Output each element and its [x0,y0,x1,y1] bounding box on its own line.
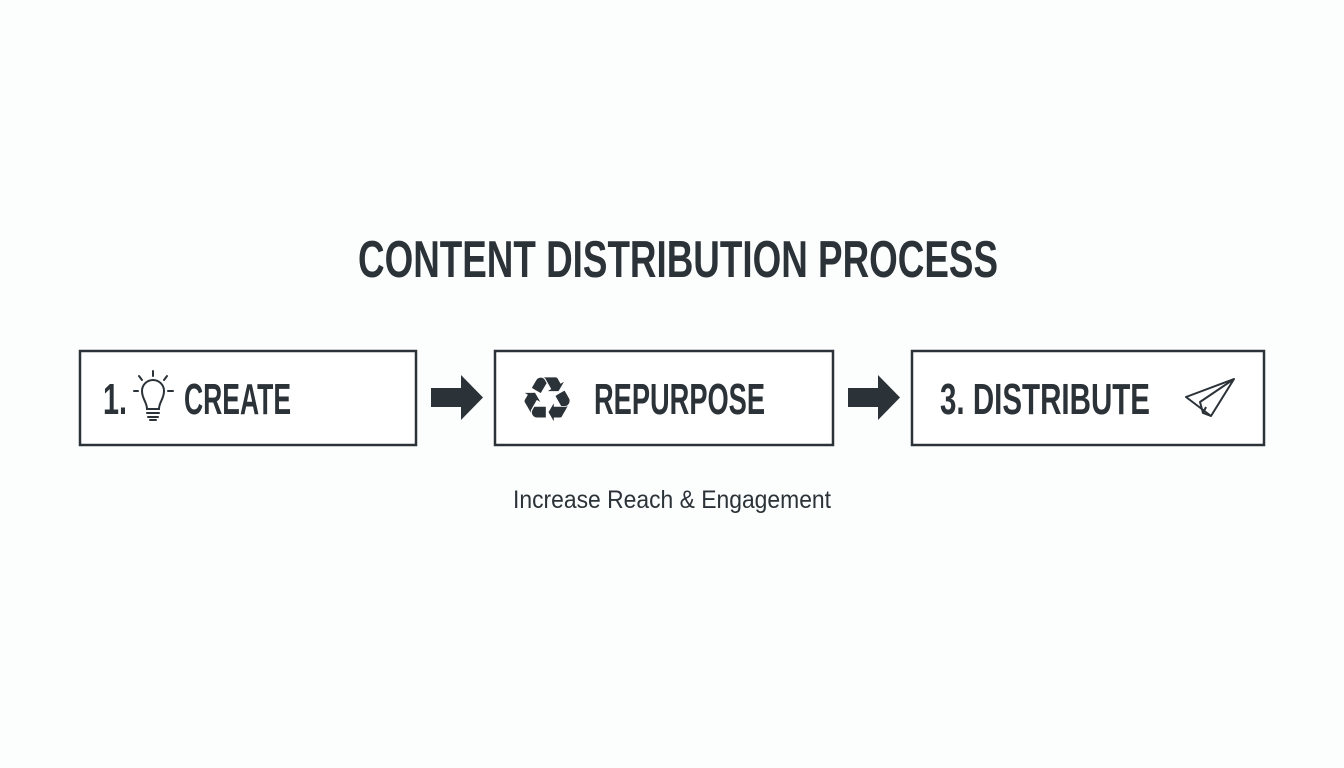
panel: step 1 create [80,351,416,445]
step 1 number: 1. [103,375,127,424]
panel: step 2 repurpose [495,351,833,445]
step 2 label: REPURPOSE [594,375,765,424]
arrow 2 [848,375,900,420]
step 3 label: 3. DISTRIBUTE [940,375,1150,424]
panel: step 3 distribute [912,351,1264,445]
title: CONTENT DISTRIBUTION PROCESS [358,231,998,289]
arrow 1 [431,375,483,420]
icon: paper plane [1186,379,1234,416]
icon: light bulb [134,371,173,420]
step 1 label: CREATE [184,375,291,424]
subtitle: Increase Reach & Engagement [513,486,831,514]
icon: recycle: ♻ [519,363,575,436]
